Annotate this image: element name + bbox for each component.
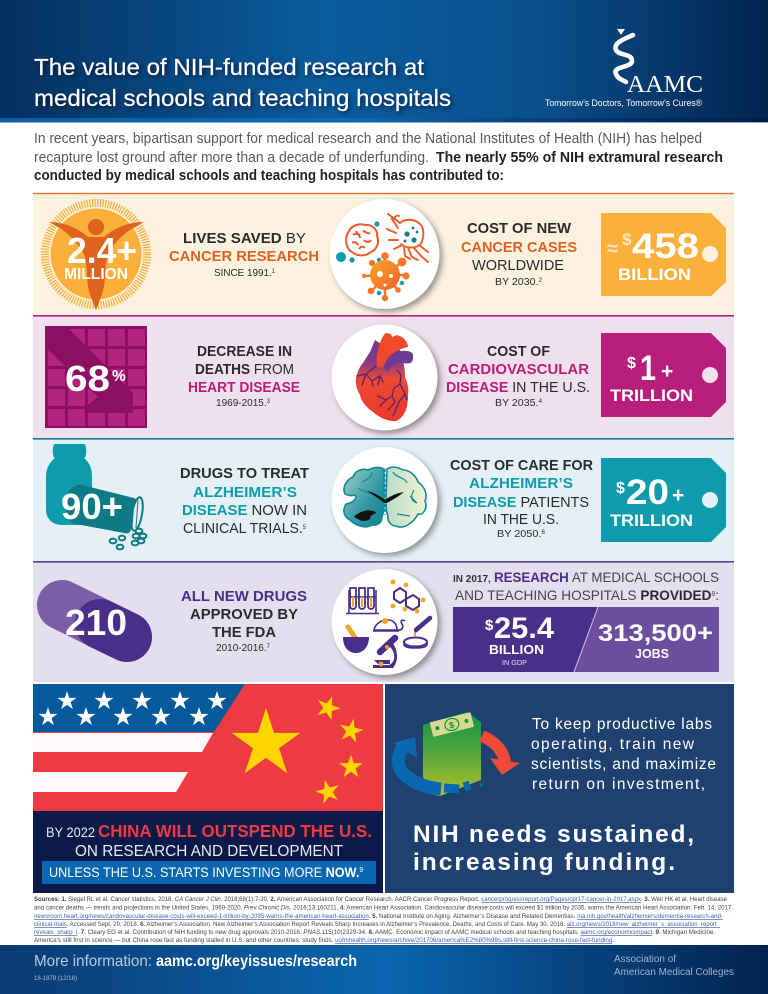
text: cost of care for alzheimer's	[450, 457, 593, 540]
text: cost of care for alzheimer's: DISEASE PATIENTS	[453, 494, 589, 511]
intro text	[34, 131, 723, 184]
panel: new drugs	[33, 561, 734, 682]
title	[34, 54, 451, 111]
text: cost of cardiovascular disease: COST OF	[487, 343, 550, 360]
sources: and cancer deaths — trends and projections in the United States, 1969-2020. Prev Chronic Dis. 2016;13:160211. 4. American Heart Association. Cardiovascular disease costs will exceed $1 trillion by 2035, warns the American Heart Association. Feb. 14, 2017.	[34, 904, 733, 912]
text: all new drugs	[181, 588, 307, 654]
more information link: More information:	[34, 953, 152, 970]
stat box: GDP and jobs: IN GDP	[502, 658, 527, 667]
text: cost of cardiovascular disease: 4	[538, 399, 543, 405]
icon: 68% grid: 68	[65, 358, 110, 399]
heading: NIH needs sustained funding	[413, 821, 694, 876]
icon: person in sun with 2.4+ million	[45, 203, 147, 310]
text: lives saved: LIVES SAVED BY	[183, 230, 306, 247]
text: lives saved	[169, 230, 319, 279]
intro text: In recent years, bipartisan support for medical research and the National Institutes of Health (NIH) has helped	[34, 131, 702, 147]
price tag: 20 trillion: +	[672, 484, 684, 507]
price tag: 458 billion	[601, 213, 726, 296]
title: The value of NIH-funded research at	[34, 54, 424, 80]
intro text: recapture lost ground after more than a decade of underfunding.	[34, 150, 429, 166]
icon: money stack with circular arrows: $	[448, 720, 455, 731]
text: cost of new cancer cases: COST OF NEW	[467, 220, 572, 237]
text: drugs to treat alzheimer's: ALZHEIMER’S	[193, 484, 297, 501]
stat box: GDP and jobs: 25.4	[494, 612, 554, 645]
text: cost of care for alzheimer's: 6	[541, 530, 546, 536]
price tag: 458 billion: ≈	[607, 238, 618, 260]
price tag: 20 trillion: 20	[626, 473, 669, 512]
callout: china will outspend	[33, 811, 383, 893]
price tag: 458 billion: BILLION	[618, 265, 691, 284]
text: research provided: :	[715, 587, 719, 603]
panel: cancer	[33, 193, 734, 316]
sources: Sources: 1. Siegel RL et al. Cancer statistics, 2018. CA Cancer J Clin. 2018;68(1):7-30. 2. American Association for Cancer Research. AACR Cancer Progress Report. cancerprogressreport.org/Pages/cpr17-cancer-in-2017.aspx. 3. Weir HK et al. Heart disease	[34, 896, 727, 903]
header banner	[0, 0, 768, 123]
text: cost of new cancer cases	[461, 220, 577, 288]
text: decrease in deaths: 1969-2015.	[216, 398, 267, 409]
text: decrease in deaths: DECREASE IN	[197, 343, 292, 360]
callout: china will outspend: ON RESEARCH AND DEVELOPMENT	[75, 843, 343, 860]
text: drugs to treat alzheimer's: DRUGS TO TREAT	[180, 465, 309, 482]
logo: AAMC: AAMC	[627, 72, 703, 98]
text: all new drugs: APPROVED BY	[190, 606, 298, 623]
text: cost of cardiovascular disease: DISEASE IN THE U.S.	[446, 379, 590, 396]
text: cost of care for alzheimer's: ALZHEIMER’S	[469, 475, 573, 492]
text: cost of care for alzheimer's: IN THE U.S.	[483, 511, 559, 528]
text: to keep productive labs: operating, train new	[531, 736, 695, 753]
icon: China stars	[232, 692, 365, 805]
text: research provided	[453, 569, 719, 603]
text: research provided: AND TEACHING HOSPITALS PROVIDED	[455, 587, 714, 603]
icon: money stack with circular arrows	[393, 712, 520, 796]
text: decrease in deaths: HEART DISEASE	[188, 379, 300, 396]
icon: pill bottles with 90+: 90+	[61, 486, 123, 527]
icon: 68% grid	[45, 326, 147, 428]
text: drugs to treat alzheimer's: 5	[303, 525, 307, 531]
heading: NIH needs sustained funding: NIH needs sustained,	[413, 821, 694, 848]
text: all new drugs: 2010-2016.	[216, 643, 267, 654]
footer	[0, 945, 768, 994]
price tag: 458 billion: 458	[632, 227, 699, 266]
panel: alzheimer's	[33, 438, 734, 562]
text: all new drugs: THE FDA	[212, 624, 276, 641]
icon: person in sun with 2.4+ million: MILLION	[64, 266, 128, 283]
text: cost of cardiovascular disease: CARDIOVASCULAR	[448, 361, 589, 378]
price tag: 1 trillion: 1	[640, 349, 656, 388]
text: all new drugs: 7	[267, 644, 271, 650]
text: decrease in deaths: DEATHS FROM	[195, 361, 294, 378]
logo: AAMC	[545, 29, 703, 109]
price tag: 1 trillion: +	[661, 360, 673, 383]
text: to keep productive labs: return on investment,	[532, 776, 705, 793]
text: cost of new cancer cases: 2	[538, 278, 543, 284]
sources: America’s still first in science — but China rose fast as funding stalled in U.S. and other countries, study finds. uofmhealth.org/news/archive/201706/america%E2%80%99s-still-first-science-china-rose-fast-funding.	[34, 937, 614, 944]
organization name	[614, 953, 734, 978]
text: cost of cardiovascular disease	[446, 343, 590, 409]
icon: capsule with 210: 210	[65, 602, 127, 643]
price tag: 458 billion: $	[622, 230, 632, 249]
icon: cancer cells circle	[330, 199, 440, 309]
price tag: 20 trillion: TRILLION	[610, 511, 693, 530]
text: all new drugs: ALL NEW DRUGS	[181, 588, 307, 605]
stat box: GDP and jobs: JOBS	[635, 646, 669, 661]
organization name: Association of	[614, 953, 676, 965]
sources: clinical-trials. Accessed Sept. 20, 2018. 6. Alzheimer’s Association. New Alzheimer’s Association Report Reveals Sharp Increases in Alzheimer’s Prevalence, Deaths, and Costs of Care. May 30, 2018. alz.org/news/2018/new_alzheimer_s_association_report_	[34, 921, 720, 928]
stat box: GDP and jobs: $	[485, 617, 494, 634]
text: to keep productive labs: To keep productive labs	[532, 716, 712, 733]
organization name: American Medical Colleges	[614, 966, 734, 978]
panel: NIH funding call to action	[385, 684, 734, 893]
text: drugs to treat alzheimer's: DISEASE NOW IN	[182, 502, 307, 519]
text: research provided: 8	[711, 591, 715, 598]
text: cost of new cancer cases: CANCER CASES	[461, 239, 577, 256]
text: decrease in deaths	[188, 343, 300, 409]
icon: heart circle	[332, 324, 438, 430]
icon: US stars	[38, 691, 227, 725]
price tag: 1 trillion	[601, 333, 726, 417]
text: research provided: IN 2017, RESEARCH AT MEDICAL SCHOOLS	[453, 569, 719, 585]
price tag: 20 trillion: $	[616, 480, 625, 497]
text: decrease in deaths: 3	[267, 399, 271, 405]
text: drugs to treat alzheimer's: CLINICAL TRIALS.	[183, 520, 311, 537]
price tag: 1 trillion: $	[627, 355, 636, 372]
logo: AAMC: Tomorrow’s Doctors, Tomorrow’s Cures®	[545, 98, 702, 109]
price tag: 20 trillion	[601, 458, 726, 542]
text: cost of care for alzheimer's: COST OF CARE FOR	[450, 457, 593, 474]
more information link: aamc.org/keyissues/research	[156, 953, 357, 970]
sources	[34, 896, 733, 944]
text: to keep productive labs	[531, 716, 716, 793]
text: drugs to treat alzheimer's	[180, 465, 309, 537]
sources: newsroom.heart.org/news/cardiovascular-disease-costs-will-exceed-1-trillion-by-2035-warns-the-american-heart-association. 5. National Institute on Aging. Alzheimer’s Disease and Related Dementias. nia.nih.gov/health/alzheimers/dementia-research-and-	[34, 913, 723, 920]
stat box: GDP and jobs: 313,500+	[598, 620, 713, 647]
text: cost of care for alzheimer's: BY 2050.	[497, 529, 538, 540]
text: to keep productive labs: scientists, and maximize	[531, 756, 716, 773]
text: lives saved: 1	[272, 269, 276, 275]
intro text: conducted by medical schools and teaching hospitals has contributed to:	[34, 168, 504, 184]
icon: lab equipment circle	[332, 569, 438, 675]
text: cost of cardiovascular disease: BY 2035.	[495, 398, 536, 409]
more information link	[34, 953, 357, 970]
icon: 68% grid: %	[112, 368, 126, 385]
heading: NIH needs sustained funding: increasing funding.	[413, 849, 675, 876]
text: lives saved: CANCER RESEARCH	[169, 248, 319, 265]
callout: china will outspend: UNLESS THE U.S. STARTS INVESTING MORE NOW.	[49, 865, 362, 880]
callout: china will outspend: CHINA WILL OUTSPEND THE U.S.	[98, 821, 372, 841]
text: cost of new cancer cases: BY 2030.	[495, 277, 536, 288]
icon: brain circle	[332, 447, 438, 553]
text: cost of new cancer cases: WORLDWIDE	[472, 257, 564, 274]
callout: china will outspend: BY 2022	[46, 825, 95, 840]
icon: person in sun with 2.4+ million: 2.4+	[67, 230, 137, 271]
price tag: 1 trillion: TRILLION	[610, 386, 693, 405]
icon: pill bottles with 90+	[46, 444, 146, 549]
text: lives saved: SINCE 1991.	[214, 268, 272, 279]
panel: china vs US flags	[33, 684, 383, 893]
intro text: The nearly 55% of NIH extramural research	[436, 150, 723, 166]
callout: china will outspend: 9	[359, 867, 363, 874]
sources: reveals_sharp_i. 7. Cleary EG et al. Contribution of NIH funding to new drug approvals 2010-2016. PNAS.115(10)2329-34. 8. AAMC. Economic impact of AAMC medical schools and teaching hospitals. aamc.org/economicimpact. 9. Michigan Medicine.	[34, 929, 715, 936]
panel: heart disease	[33, 315, 734, 439]
publication code: 18-1878 (12/18)	[34, 976, 77, 982]
title: medical schools and teaching hospitals	[34, 85, 451, 111]
stat box: GDP and jobs: BILLION	[489, 642, 544, 657]
stat box: GDP and jobs	[453, 607, 719, 672]
